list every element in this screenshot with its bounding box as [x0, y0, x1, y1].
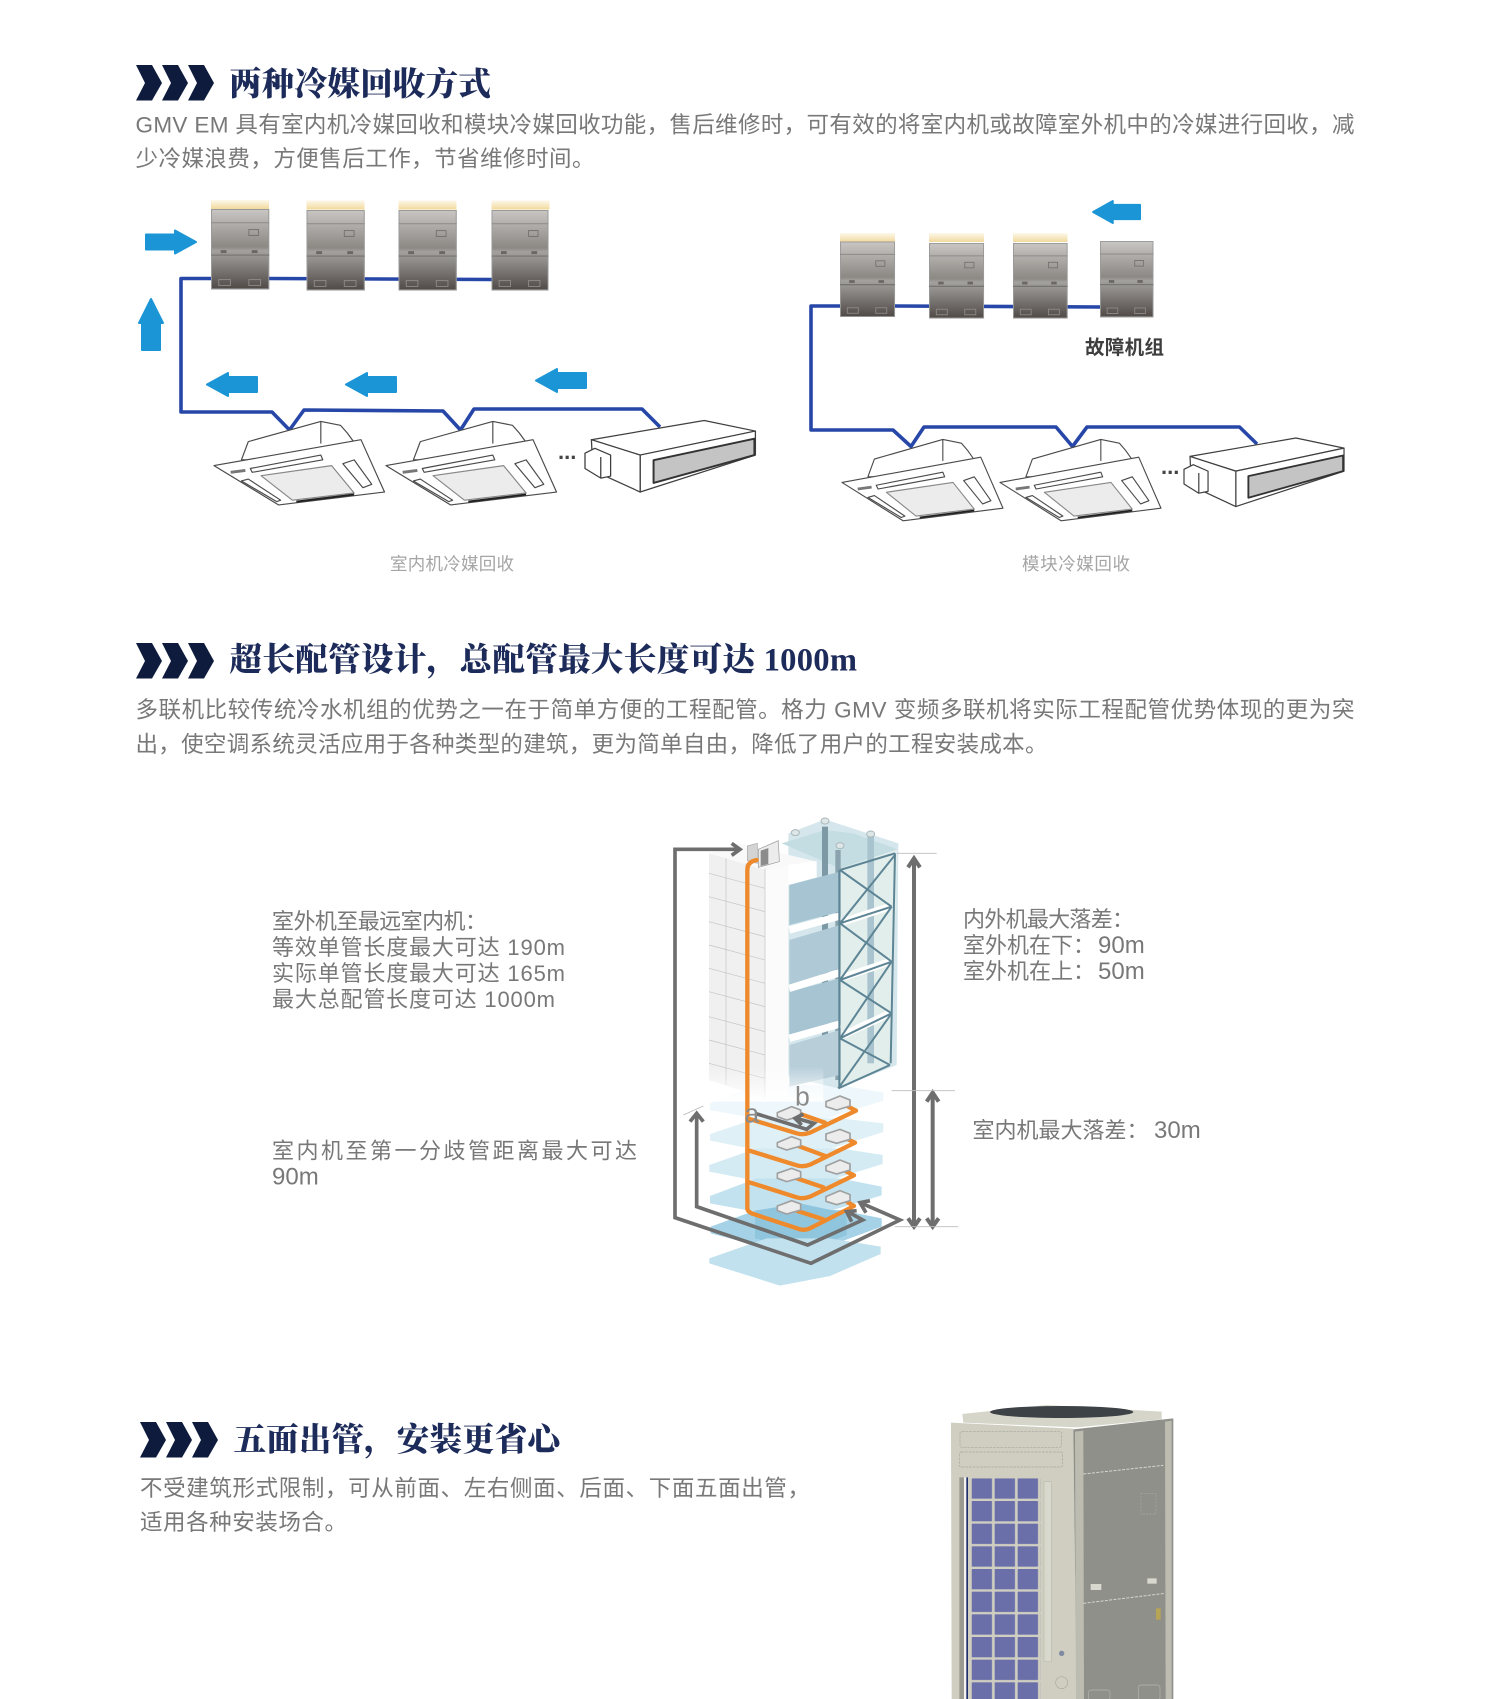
dimension: total height [908, 858, 920, 1227]
text block: max height difference: 内外机最大落差： [963, 907, 1134, 932]
indoor cassette unit 1 [214, 421, 385, 505]
text block: max height difference: 室外机在下： [963, 933, 1095, 958]
indoor cassette unit 2 [1000, 439, 1161, 521]
section 1 heading icon: chevrons [136, 65, 214, 100]
section 2 description [136, 698, 1354, 757]
dimension: indoor height [927, 1093, 939, 1227]
orange refrigerant pipes [747, 860, 856, 1230]
outdoor unit 1 [840, 233, 895, 317]
text block: outdoor to farthest indoor lengths: 实际单管长度最大可达 165m [272, 961, 565, 986]
caption: module recovery: 模块冷媒回收 [1022, 554, 1130, 574]
building: white facade [707, 841, 823, 1102]
ellipsis dots: ... [1161, 454, 1179, 479]
panel: module refrigerant recovery diagram [811, 201, 1344, 521]
indoor cassette unit 2 [386, 421, 557, 505]
section 2 description: 出，使空调系统灵活应用于各种类型的建筑，更为简单自由，降低了用户的工程安装成本。 [136, 732, 1048, 757]
text block: outdoor to farthest indoor lengths: 室外机至最远室内机： [272, 909, 487, 934]
text block: indoor height difference: 室内机最大落差： [972, 1118, 1149, 1143]
thin tick at arrow end [683, 1106, 703, 1115]
text block: max height difference [963, 907, 1145, 985]
text block: outdoor to farthest indoor lengths: 最大总配管长度可达 1000m [272, 987, 555, 1012]
text block: indoor height difference: 30m [1154, 1117, 1201, 1144]
section 3 heading icon: chevrons [140, 1422, 218, 1458]
section 1 description: 少冷媒浪费，方便售后工作，节省维修时间。 [136, 146, 594, 172]
section 3 title: 五面出管，安装更省心 [234, 1420, 565, 1460]
arrow: outer pipe run [675, 843, 900, 1263]
piping [811, 306, 1257, 446]
indoor units on floors [777, 1096, 850, 1214]
label a: a [744, 1098, 759, 1128]
caption: indoor recovery: 室内机冷媒回收 [390, 554, 514, 574]
section 3 description [140, 1476, 810, 1535]
text block: max height difference: 90m [1098, 932, 1145, 959]
text block: max height difference: 50m [1098, 958, 1145, 985]
text block: outdoor to farthest indoor lengths [272, 909, 565, 1012]
outdoor unit 3 [1013, 233, 1068, 318]
arrow: up [139, 299, 163, 350]
outdoor unit 2 [306, 200, 365, 290]
section 1 description: GMV EM 具有室内机冷媒回收和模块冷媒回收功能，售后维修时，可有效的将室内机或故障室外机中的冷媒进行回收，减 [136, 112, 1354, 138]
text block: indoor to first branch [272, 1138, 637, 1190]
arrow: left 2 [346, 373, 396, 396]
outdoor unit 3 [398, 200, 457, 290]
chart: building piping diagram [675, 818, 958, 1286]
outdoor unit 4 [492, 200, 550, 290]
arrow: left above faulty unit [1093, 201, 1140, 223]
arrow: left 3 [536, 369, 586, 392]
piping [181, 278, 660, 430]
ellipsis dots: ... [558, 439, 576, 464]
text block: indoor to first branch: 室内机至第一分歧管距离最大可达 [272, 1138, 637, 1164]
arrow: inner pipe run [690, 1113, 863, 1245]
building: glass tower [782, 818, 898, 1088]
text block: outdoor to farthest indoor lengths: 等效单管长度最大可达 190m [272, 935, 565, 960]
outdoor unit 1 [211, 200, 269, 289]
text block: max height difference: 室外机在上： [963, 959, 1095, 984]
faulty outdoor unit 4 [1100, 241, 1153, 317]
indoor duct unit [1184, 438, 1344, 507]
section 3 description: 适用各种安装场合。 [140, 1510, 347, 1535]
outdoor unit 2 [929, 233, 984, 318]
dimension ticks [892, 853, 958, 1227]
section 2 title: 超长配管设计，总配管最大长度可达 1000m [230, 640, 857, 680]
label b: b [795, 1082, 810, 1112]
section 3 description: 不受建筑形式限制，可从前面、左右侧面、后面、下面五面出管， [140, 1476, 810, 1501]
top lid and fan [962, 1405, 1162, 1427]
connector pipes between outdoor units [268, 278, 492, 280]
indoor duct unit [585, 420, 755, 492]
outdoor unit product image [951, 1405, 1173, 1699]
panel: indoor unit refrigerant recovery diagram [139, 200, 755, 505]
section 2 description: 多联机比较传统冷水机组的优势之一在于简单方便的工程配管。格力 GMV 变频多联机将实际工程配管优势体现的更为突 [136, 698, 1354, 722]
arrow: into outdoor units [146, 230, 196, 254]
label: faulty unit: 故障机组 [1085, 336, 1164, 359]
section 1 description [136, 112, 1354, 172]
arrow: left 1 [207, 373, 257, 396]
floor plates [709, 1085, 883, 1286]
text block: indoor to first branch: 90m [272, 1164, 319, 1190]
section 1 title: 两种冷媒回收方式 [229, 65, 491, 103]
front face [951, 1423, 1077, 1699]
side face [1073, 1418, 1173, 1699]
connector pipes between outdoor units [895, 306, 1101, 307]
section 2 heading icon: chevrons [136, 643, 214, 678]
indoor cassette unit 1 [842, 439, 1003, 521]
